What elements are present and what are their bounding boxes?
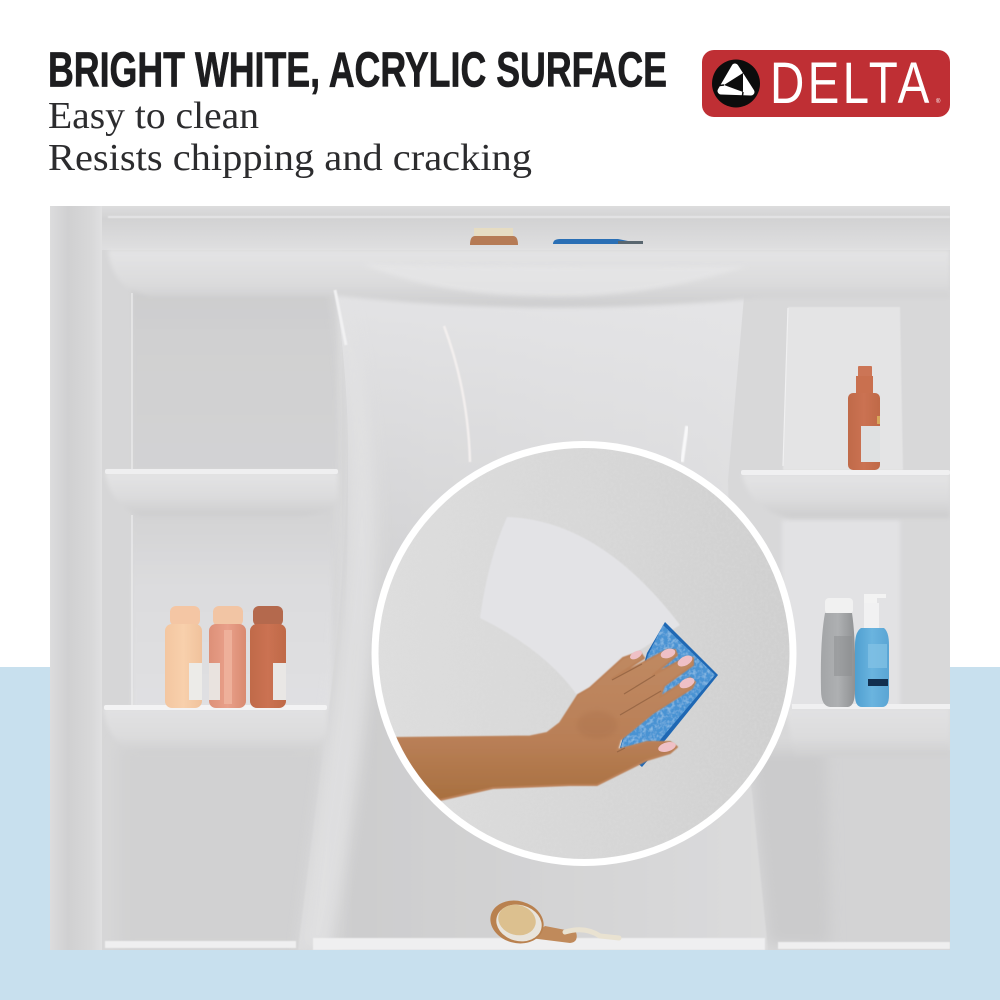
circle content xyxy=(375,444,793,864)
left fold highlight xyxy=(335,290,346,345)
logo: Delta xyxy=(702,50,950,117)
bottles: left trio xyxy=(165,606,286,708)
magnified circle callout xyxy=(372,441,796,866)
left shelf 2 underside xyxy=(105,710,324,728)
terracotta bottle xyxy=(250,606,286,708)
panel left soft fold xyxy=(312,473,376,940)
soiled acrylic surface xyxy=(375,444,793,864)
nail little xyxy=(678,676,696,690)
panel: acrylic shower wall photo xyxy=(50,206,950,950)
right shelf 1 lip xyxy=(741,470,950,475)
right lower niche xyxy=(782,520,900,708)
right shelf 1 underside xyxy=(745,475,948,486)
top shelf blue brush xyxy=(553,239,643,244)
wall base xyxy=(342,250,950,578)
right side walls xyxy=(725,290,950,950)
left side walls xyxy=(102,250,342,950)
finger crease lines xyxy=(612,664,661,752)
page background xyxy=(0,0,1000,667)
right lower dark band xyxy=(755,752,814,942)
top band ledge highlight xyxy=(108,216,950,218)
nail thumb xyxy=(657,740,677,754)
body brush on bottom ledge xyxy=(485,895,619,949)
sponge face xyxy=(621,625,715,764)
title: BRIGHT WHITE, ACRYLIC SURFACE xyxy=(48,43,667,98)
central curved panel xyxy=(762,898,766,932)
soap grain texture xyxy=(375,444,793,864)
right lower wall xyxy=(800,750,950,950)
right upper niche xyxy=(783,307,903,470)
bottle: grey shampoo xyxy=(821,598,855,707)
right shelf 2 underside xyxy=(789,710,946,716)
left shelf 1 underside xyxy=(107,474,337,490)
top band xyxy=(102,243,950,250)
curved highlight left xyxy=(444,326,470,462)
lower left wall xyxy=(118,745,333,950)
nail index xyxy=(629,649,643,661)
lower left niche xyxy=(134,628,328,706)
nail middle xyxy=(659,647,677,660)
crescent highlight beneath top shelf xyxy=(422,278,684,296)
glint lower right xyxy=(682,426,687,462)
left shelf 2 lip xyxy=(104,705,327,710)
peach bottle xyxy=(165,606,202,708)
clear pink bottle xyxy=(209,606,246,708)
left niche highlight lines xyxy=(132,293,133,705)
right shelf 2 lip xyxy=(792,704,950,709)
right niche highlight line xyxy=(783,308,788,466)
sponge dark edge xyxy=(620,622,718,767)
upper left niche xyxy=(135,296,328,300)
logo wordmark: DELTA xyxy=(770,52,933,116)
central panel upper glow xyxy=(338,296,744,518)
bottle: right upper terracotta pump xyxy=(848,366,880,470)
circle white ring xyxy=(372,441,796,866)
bottle: blue facial cleanser xyxy=(855,594,889,707)
top shelf underside xyxy=(108,250,950,308)
logo red badge xyxy=(702,50,950,117)
cleaned streak xyxy=(480,517,680,695)
knuckle shadow xyxy=(577,711,617,739)
hand and forearm silhouette xyxy=(396,650,695,800)
left shelf 1 lip xyxy=(105,469,338,474)
sponge xyxy=(620,622,718,767)
registered mark: ® xyxy=(936,98,941,105)
bottom ledge xyxy=(105,938,950,950)
left vertical column xyxy=(97,206,102,950)
nail ring xyxy=(676,653,694,669)
arm and hand xyxy=(396,647,696,800)
logo emblem xyxy=(712,60,760,108)
top shelf nail brush xyxy=(470,228,518,245)
light blue lower band xyxy=(0,667,1000,1000)
subtitle line 1: Easy to clean xyxy=(48,95,259,137)
subtitle line 2: Resists chipping and cracking xyxy=(48,137,532,179)
